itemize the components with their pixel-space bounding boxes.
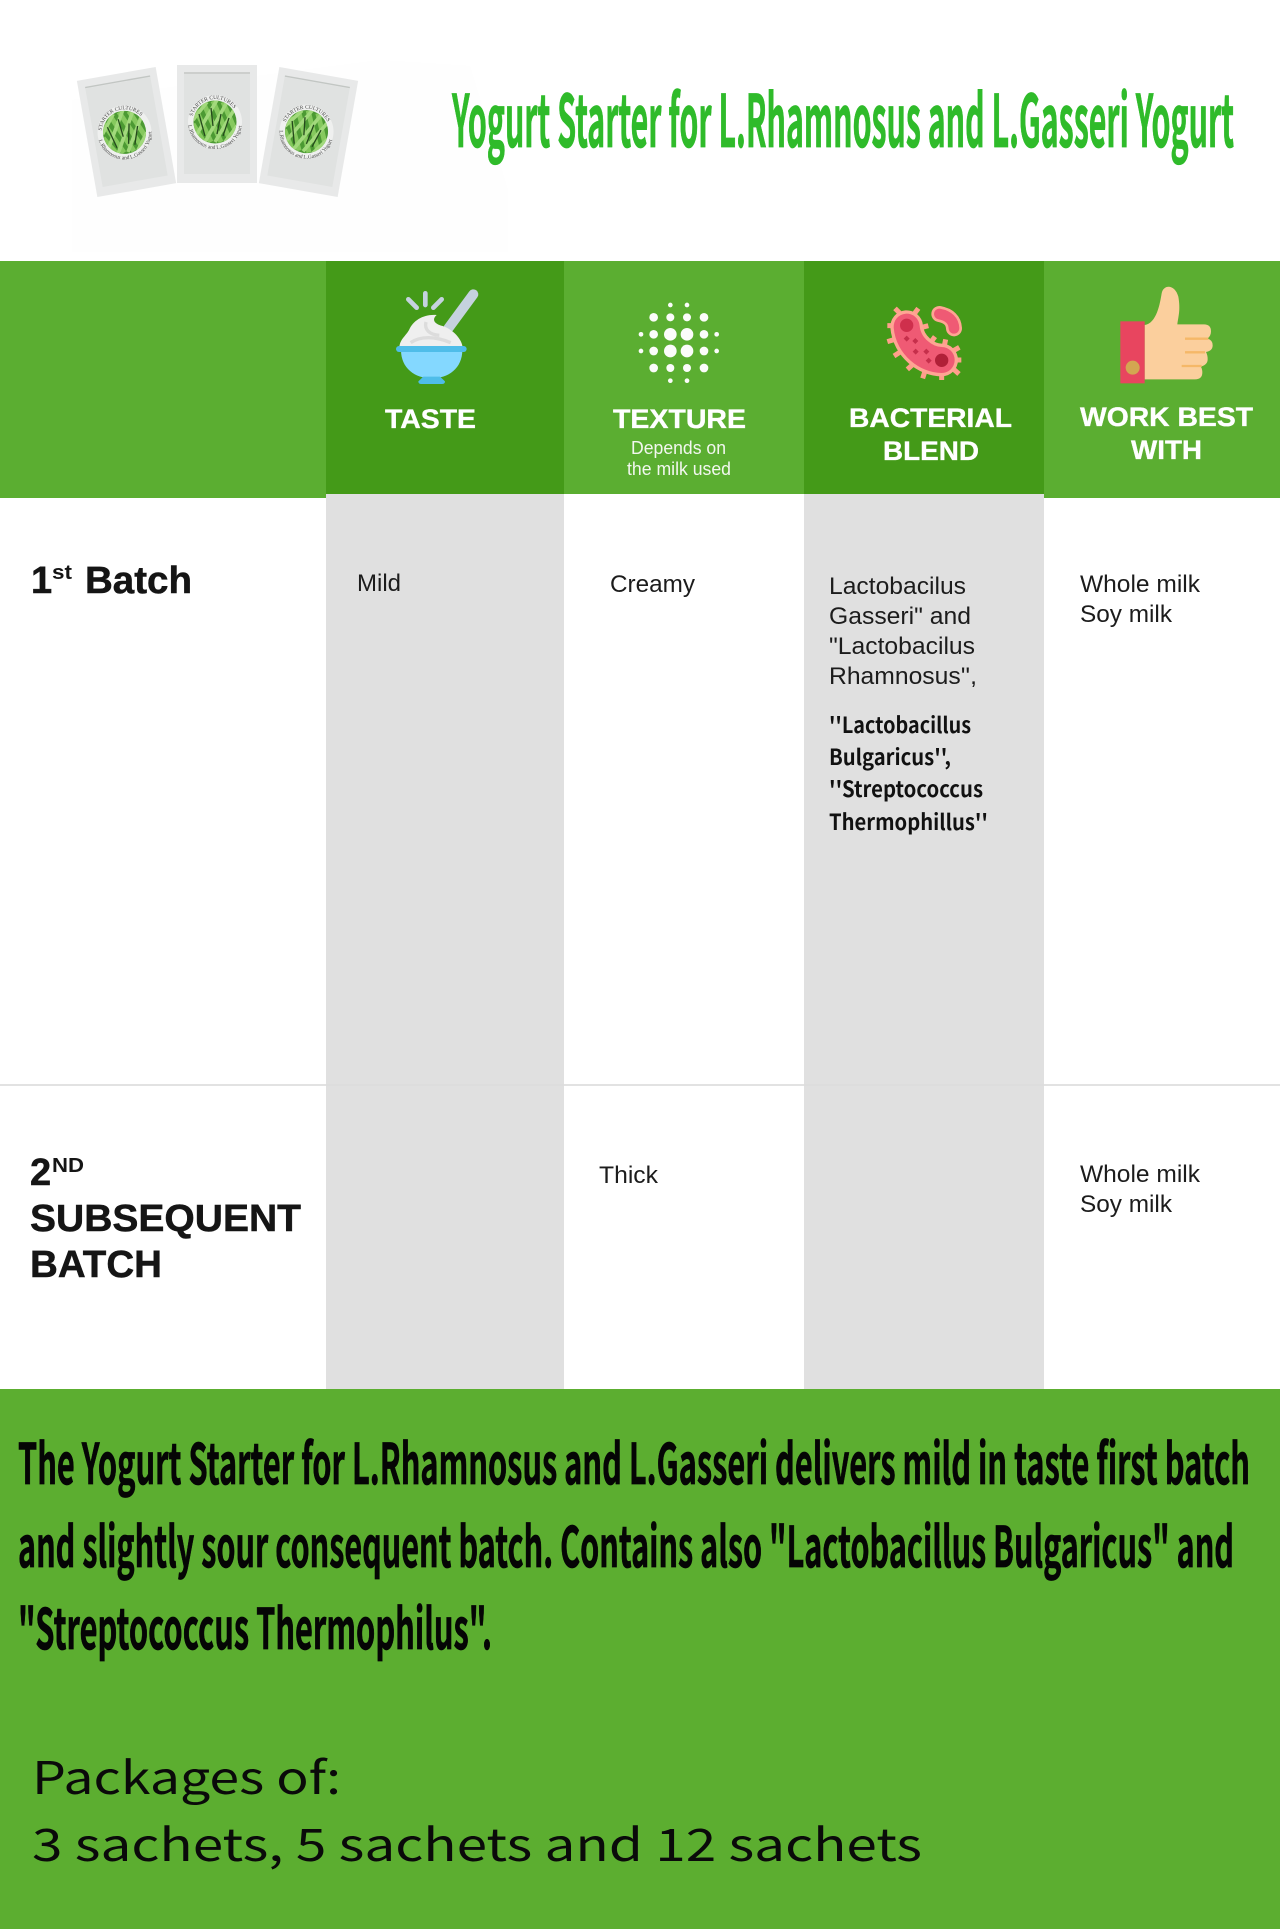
heading: bacterial blend: BLEND xyxy=(883,436,979,466)
icon: thumbs up xyxy=(1120,287,1213,383)
table header band xyxy=(0,261,1280,498)
row label: 2nd subsequent batch: 2 xyxy=(30,1152,51,1194)
row label: 1st batch: 1 xyxy=(31,560,52,602)
sachet: centre: STARTER CULTURES xyxy=(190,96,236,116)
cell: bacterial blend: ''Streptococcus xyxy=(829,772,983,804)
cell: work best with, second batch xyxy=(1080,1161,1201,1218)
package sizes: 3 sachets, 5 sachets and 12 sachets xyxy=(32,1809,922,1874)
panel: summary footer xyxy=(0,1389,1280,1929)
cell: bacterial blend xyxy=(829,573,988,837)
row label: 2nd subsequent batch xyxy=(30,1152,301,1286)
package sizes xyxy=(32,1742,922,1874)
summary text: "Streptococcus Thermophilus". xyxy=(18,1585,492,1666)
sachet: left xyxy=(77,67,176,197)
header: taste xyxy=(326,261,564,494)
grey column: taste xyxy=(326,494,564,1390)
sachet: right xyxy=(259,67,358,197)
header: texture xyxy=(613,303,746,479)
row label: 1st batch xyxy=(31,560,192,602)
icon: bacteria xyxy=(887,308,961,380)
grey column: bacterial blend xyxy=(804,494,1044,1390)
cell: bacterial blend: Thermophillus'' xyxy=(829,805,988,837)
row label: 1st batch: st xyxy=(52,562,72,584)
sachet: centre xyxy=(177,65,257,183)
row label: 1st batch: Batch xyxy=(85,560,192,602)
sachet: left: L.Rhamnosus and L.Gasseri Yogurt xyxy=(98,131,152,160)
row label: 2nd subsequent batch: SUBSEQUENT xyxy=(30,1198,301,1240)
cell: texture, first batch: Creamy xyxy=(610,571,695,598)
product photo: three sachets xyxy=(77,65,358,197)
row label: 2nd subsequent batch: BATCH xyxy=(30,1244,162,1286)
sub-heading: depends on the milk used: the milk used xyxy=(627,459,731,479)
sachet: right: L.Rhamnosus and L.Gasseri Yogurt xyxy=(280,130,332,159)
icon: dot burst xyxy=(639,303,719,383)
cell: work best with, second batch: Whole milk xyxy=(1080,1161,1201,1188)
cell: texture, second batch: Thick xyxy=(599,1162,659,1189)
cell: bacterial blend: Bulgaricus'', xyxy=(829,740,951,772)
sub-heading: depends on the milk used xyxy=(627,438,731,479)
cell: work best with, second batch: Soy milk xyxy=(1080,1191,1173,1218)
cell: taste, first batch: Mild xyxy=(357,570,401,597)
header: work best with xyxy=(1080,287,1254,465)
sachet: right: STARTER CULTURES xyxy=(282,105,330,122)
heading: texture: TEXTURE xyxy=(613,404,746,434)
cell: bacterial blend: ''Lactobacillus xyxy=(829,708,971,740)
sachet: left: STARTER CULTURES xyxy=(98,106,143,130)
cell: bacterial blend: Lactobacilus xyxy=(829,573,966,600)
cell: bacterial blend: "Lactobacilus xyxy=(829,633,975,660)
sachet: centre: L.Rhamnosus and L.Gasseri Yogurt xyxy=(188,124,242,149)
summary text xyxy=(18,1420,1250,1666)
heading: bacterial blend: BACTERIAL xyxy=(849,403,1012,433)
sub-heading: depends on the milk used: Depends on xyxy=(631,438,726,458)
heading: work best with: WORK BEST xyxy=(1080,402,1254,432)
cell: work best with, first batch: Soy milk xyxy=(1080,601,1173,628)
cell: work best with, first batch: Whole milk xyxy=(1080,571,1201,598)
heading: taste: TASTE xyxy=(385,404,476,434)
heading: work best with: WITH xyxy=(1131,435,1202,465)
package sizes: Packages of: xyxy=(32,1742,341,1807)
row label: 2nd subsequent batch: ND xyxy=(52,1155,84,1177)
cell: bacterial blend: Rhamnosus'', xyxy=(829,663,977,690)
heading: bacterial blend xyxy=(849,403,1012,466)
cell: bacterial blend: Gasseri" and xyxy=(829,603,971,630)
header: bacterial blend xyxy=(804,261,1044,494)
icon: yogurt bowl with spoon xyxy=(396,293,473,384)
heading: work best with xyxy=(1080,402,1254,465)
cell: work best with, first batch xyxy=(1080,571,1201,628)
